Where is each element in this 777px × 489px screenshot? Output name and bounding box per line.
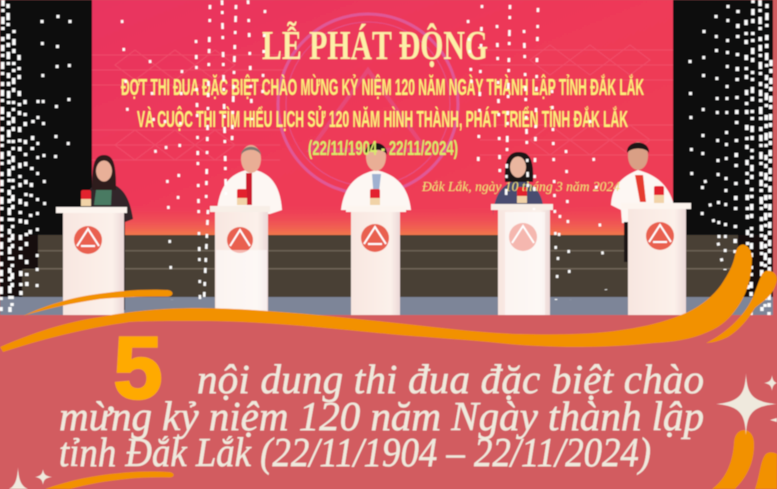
person 2 [217,145,282,214]
red button [654,186,664,196]
orange swoosh: main [0,244,752,352]
red button [237,189,247,199]
person 1 [84,155,133,310]
orange swoosh: bottom right [712,430,754,489]
stage backdrop [0,0,777,316]
logo [646,222,674,250]
person 4 [493,152,543,216]
orange swoosh: top right [706,271,777,343]
red button [81,190,91,200]
headline line 1: nội dung thi đua đặc biệt chào [197,356,704,402]
screen place and date: Đắk Lắk, ngày 10 tháng 3 năm 2024 [421,180,620,195]
logo [361,224,389,252]
headline line 2: mừng kỷ niệm 120 năm Ngày thành lập [59,393,704,439]
star: right edge [770,418,777,422]
logo [509,223,537,251]
person 3 [341,143,411,210]
orange swoosh: top left [23,290,172,316]
number 5: 5 [114,318,162,417]
star: small right [764,375,777,391]
red button [517,187,527,197]
stage floor [0,297,777,316]
headline line 3: tỉnh Đắk Lắk (22/11/1904 – 22/11/2024) [59,429,651,475]
stage steps [0,235,777,300]
podium 5 [621,186,691,316]
podium 4 [491,187,553,316]
star: bottom left [9,467,28,489]
logo [74,226,102,254]
logo [227,227,253,253]
screen emblem ring [278,14,458,194]
podium 3 [346,189,406,316]
red button [370,189,380,199]
right edge strip [773,0,777,316]
sparks [1,0,771,315]
panel: red text band [0,315,777,489]
star: small left [35,469,52,485]
podium 2 [210,189,270,316]
headline [59,356,704,475]
spark glow on podiums [216,212,545,316]
podium 1 [56,190,127,316]
orange swoosh: bottom corner [755,452,777,489]
screen heading: LỄ PHÁT ĐỘNG [262,22,488,68]
orange swoosh: bottom left [45,471,174,489]
person 5 [611,142,674,262]
LED screen [92,0,673,235]
star: large right [716,373,777,435]
screen dates: (22/11/1904 - 22/11/2024) [308,138,458,160]
